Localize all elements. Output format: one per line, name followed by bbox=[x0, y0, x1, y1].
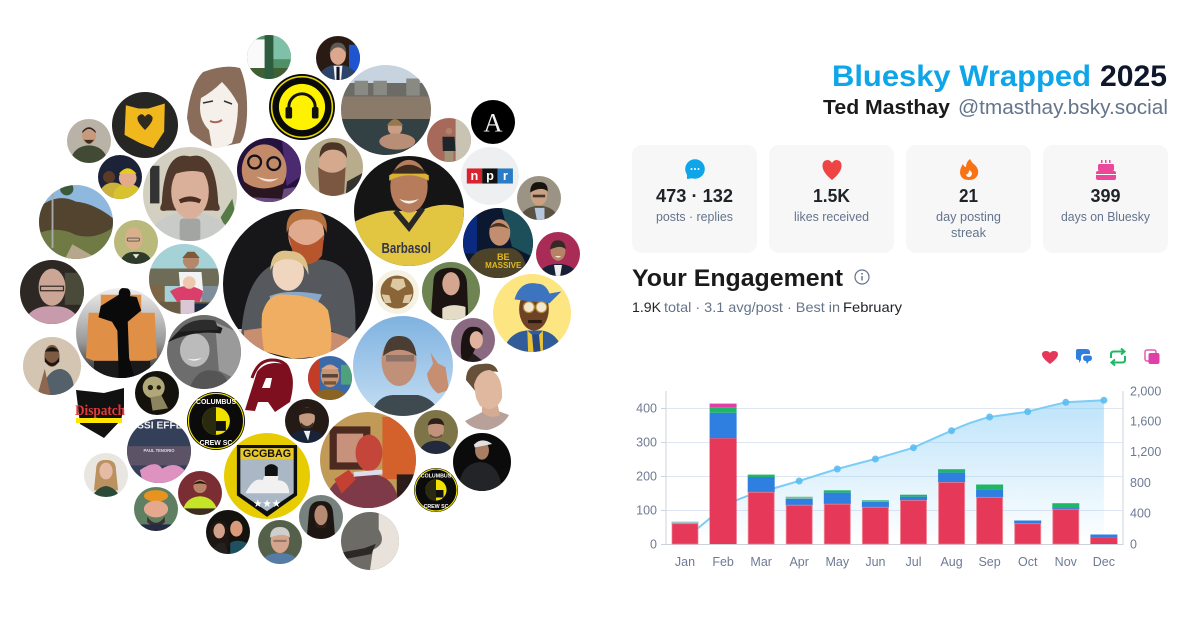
avatar: Dispatch Ohio logo bbox=[75, 388, 126, 438]
avatar: Messi Effect book cover: PAUL TENORIO bbox=[143, 448, 175, 453]
avatar: man pointing at sky bbox=[353, 316, 453, 416]
panel: days on Bluesky: 399 bbox=[1090, 186, 1120, 206]
engagement chart bbox=[636, 384, 1161, 569]
bar: Mar bbox=[748, 475, 775, 544]
month labels: Apr bbox=[789, 555, 809, 569]
bar: Dec bbox=[1090, 534, 1117, 544]
avatar: large man in yellow Crew jersey bbox=[354, 156, 464, 266]
avatar: speaker with BE MASSIVE shirt bbox=[463, 208, 533, 278]
icon: legend replies bbox=[1076, 349, 1092, 364]
avatar: speaker with BE MASSIVE shirt: BE bbox=[497, 252, 510, 262]
avatar: skull with cigarette painting bbox=[135, 371, 179, 415]
avatar: cartoon man in blue cap on yellow bbox=[493, 274, 571, 352]
month labels: Mar bbox=[750, 555, 772, 569]
month labels bbox=[675, 555, 1115, 569]
chart legend icons bbox=[1042, 348, 1160, 366]
avatar: soccer referee bbox=[178, 471, 222, 515]
title: 2025 bbox=[1100, 60, 1167, 93]
icon: birthday cake bbox=[1096, 160, 1116, 180]
right axis labels: 0 bbox=[1130, 538, 1137, 552]
month labels: Jun bbox=[865, 555, 886, 569]
avatar: NPR logo: p bbox=[486, 168, 494, 183]
month labels: Oct bbox=[1018, 555, 1038, 569]
left axis labels: 100 bbox=[636, 504, 657, 518]
avatar: woman with dark hair outdoors bbox=[422, 262, 480, 320]
avatar: colourful man with glasses bbox=[308, 356, 352, 400]
avatar: emoji hat man bbox=[134, 487, 178, 531]
bar: Sep bbox=[976, 484, 1003, 544]
engagement summary text bbox=[632, 299, 902, 315]
panel: posts and replies: posts · replies bbox=[656, 210, 733, 224]
user name and handle bbox=[823, 97, 1168, 119]
left axis labels: 300 bbox=[636, 436, 657, 450]
right axis labels: 1,600 bbox=[1130, 414, 1161, 428]
avatar: large man in yellow Crew jersey: Barbasol bbox=[381, 241, 431, 257]
panel: day posting streak bbox=[906, 145, 1031, 253]
avatar: man with glasses in blazer bbox=[517, 176, 561, 220]
panel: days on Bluesky bbox=[1043, 145, 1168, 253]
avatar: Ohio heart logo bbox=[112, 92, 178, 158]
panel: likes received bbox=[769, 145, 894, 253]
avatar: man looking up (cutout) bbox=[465, 364, 509, 430]
heading: your engagement: Your Engagement bbox=[632, 265, 843, 292]
avatar: forest screenshot bbox=[247, 35, 291, 79]
bar: Feb bbox=[710, 404, 737, 544]
month labels: Aug bbox=[940, 555, 963, 569]
user name and handle: Ted Masthay bbox=[823, 97, 951, 119]
avatar: man in green jacket bbox=[67, 119, 111, 163]
icon: legend reposts bbox=[1111, 348, 1125, 366]
bar: May bbox=[824, 490, 851, 544]
avatar: GCGBAG badge bbox=[224, 433, 310, 519]
avatar: painted old man portrait bbox=[114, 220, 158, 264]
avatar: cliff landscape bbox=[39, 182, 113, 259]
left axis labels: 200 bbox=[636, 470, 657, 484]
left axis labels bbox=[636, 402, 657, 552]
avatar: black and white woman in hat bbox=[167, 315, 241, 389]
avatar: speaker with BE MASSIVE shirt: MASSIVE bbox=[485, 261, 522, 270]
bar: Jun bbox=[862, 500, 889, 544]
left axis labels: 0 bbox=[650, 538, 657, 552]
avatar: blonde woman bbox=[84, 453, 128, 497]
avatar: smiling man purple glasses bbox=[237, 138, 301, 202]
avatar: couple photo bbox=[206, 510, 250, 554]
avatar: Columbus Crew badge bbox=[187, 392, 245, 450]
icon: heart bbox=[822, 160, 842, 180]
avatar: hot tub pool bbox=[341, 65, 431, 155]
month labels: Feb bbox=[712, 555, 734, 569]
avatar: grey haired man bbox=[258, 520, 302, 564]
avatar: man with child on bench bbox=[149, 244, 219, 314]
avatar: NPR logo: r bbox=[503, 168, 508, 183]
month labels: Nov bbox=[1055, 555, 1078, 569]
avatar: man with glasses, outdoors bbox=[414, 410, 458, 454]
avatar: dark suit man bbox=[285, 399, 329, 443]
bar: Oct bbox=[1014, 520, 1041, 544]
panel: day posting streak: day posting bbox=[936, 210, 1001, 224]
avatar: Newsom in suit bbox=[316, 36, 360, 80]
user name and handle: @tmasthay.bsky.social bbox=[958, 97, 1168, 119]
avatar: man on maroon background bbox=[536, 232, 580, 276]
avatar: small Columbus Crew badge: CREW SC bbox=[424, 504, 449, 510]
month labels: Sep bbox=[978, 555, 1001, 569]
panel: likes received: 1.5K bbox=[813, 186, 850, 206]
avatar: main man holding child in blanket bbox=[223, 209, 373, 359]
avatar: bearded man bbox=[305, 138, 363, 196]
panel: days on Bluesky: days on Bluesky bbox=[1061, 210, 1151, 224]
panel: likes received: likes received bbox=[794, 210, 869, 224]
avatar: NPR logo: n bbox=[470, 168, 478, 183]
cumulative area bbox=[685, 400, 1104, 544]
month labels: Dec bbox=[1093, 555, 1115, 569]
avatar: Columbus Crew badge: CREW SC bbox=[200, 440, 232, 447]
avatar: GCGBAG badge: GCGBAG bbox=[243, 448, 291, 460]
month labels: May bbox=[825, 555, 850, 569]
avatar: man with red light bbox=[320, 412, 416, 508]
bar: Apr bbox=[786, 497, 813, 544]
avatar: yellow headphones logo bbox=[269, 74, 335, 140]
bar: Nov bbox=[1052, 503, 1079, 544]
avatar: bald man with glasses bbox=[20, 260, 84, 324]
icon: legend heart bbox=[1042, 351, 1058, 364]
icon: chat bubble bbox=[685, 159, 705, 179]
icon: info bbox=[855, 270, 869, 284]
avatar: Columbus Crew badge: COLUMBUS bbox=[196, 399, 236, 406]
axes bbox=[661, 391, 1123, 544]
stacked bars bbox=[672, 404, 1117, 544]
bar: Jan bbox=[672, 522, 698, 544]
right axis labels: 1,200 bbox=[1130, 445, 1161, 459]
engagement summary text: total · 3.1 avg/post · Best in bbox=[664, 299, 840, 315]
bar: Jul bbox=[900, 495, 927, 544]
left axis labels: 400 bbox=[636, 402, 657, 416]
right axis labels bbox=[1130, 384, 1161, 552]
panel: day posting streak: 21 bbox=[959, 186, 978, 206]
avatar: man with moustache and headphones bbox=[143, 147, 237, 241]
avatar: woman illustrated bbox=[451, 318, 495, 362]
avatar: GCGBAG badge: ★★★ bbox=[253, 499, 281, 510]
title: Bluesky Wrapped bbox=[832, 60, 1091, 93]
month labels: Jan bbox=[675, 555, 695, 569]
avatar: NPR logo bbox=[461, 147, 519, 205]
cumulative line bbox=[685, 397, 1107, 539]
month labels: Jul bbox=[906, 555, 921, 569]
icon: legend quotes bbox=[1145, 350, 1160, 364]
gridlines bbox=[666, 408, 1123, 510]
avatar: cat photo bbox=[341, 512, 399, 570]
avatar bubble cluster bbox=[20, 35, 580, 571]
avatar: Atlantic logo bbox=[471, 100, 515, 144]
panel: posts and replies bbox=[632, 145, 757, 253]
right axis labels: 2,000 bbox=[1130, 384, 1161, 398]
avatar: small Columbus Crew badge: COLUMBUS bbox=[421, 473, 452, 479]
avatar: two soccer fans bbox=[98, 155, 142, 199]
right axis labels: 800 bbox=[1130, 476, 1151, 490]
avatar: mirror selfie bbox=[427, 118, 471, 162]
avatar: beard man with prayer hands bbox=[23, 337, 81, 395]
right axis labels: 400 bbox=[1130, 506, 1151, 520]
avatar: Dispatch Ohio logo: Dispatch bbox=[75, 403, 126, 419]
avatar: silhouette in orange chair bbox=[76, 288, 166, 378]
avatar: man in black with microphone bbox=[453, 433, 511, 491]
avatar: red headset A logo bbox=[245, 360, 293, 412]
engagement summary text: February bbox=[843, 299, 902, 315]
engagement summary text: 1.9K bbox=[632, 299, 662, 315]
bar: Aug bbox=[938, 469, 965, 544]
avatar: long-haired man bbox=[299, 495, 343, 539]
avatar: small Columbus Crew badge bbox=[414, 468, 458, 512]
panel: day posting streak: streak bbox=[951, 226, 987, 240]
icon: flame bbox=[960, 159, 978, 180]
panel: posts and replies: 473 · 132 bbox=[656, 186, 733, 206]
avatar: Messi Effect book cover: MESSI EFFECT bbox=[122, 421, 197, 432]
avatar: Atlantic logo: A bbox=[483, 108, 503, 138]
avatar: cartoon woman drawing bbox=[187, 67, 247, 148]
avatar: Messi Effect book cover bbox=[127, 419, 191, 483]
avatar: soccer ball bbox=[375, 270, 419, 314]
